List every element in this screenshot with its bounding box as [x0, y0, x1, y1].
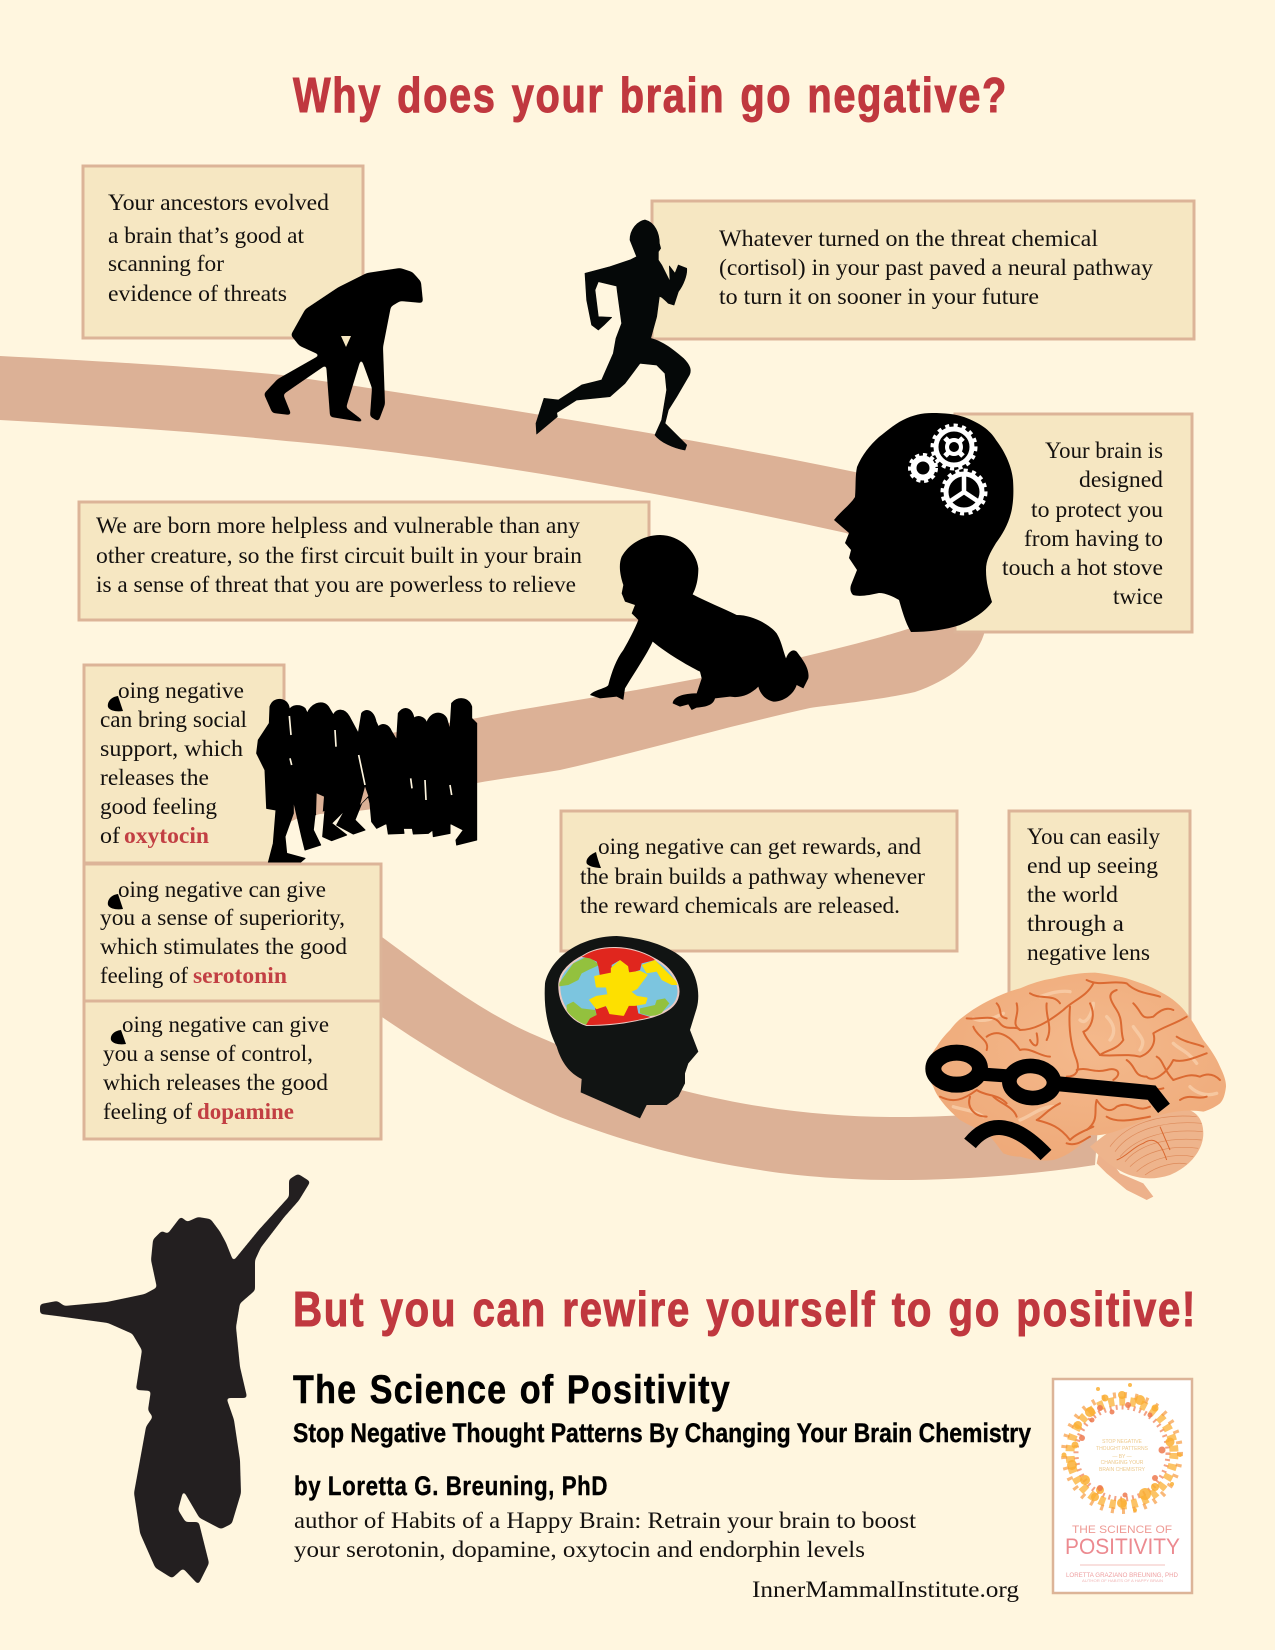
panel: ancestors: scanning for	[108, 251, 224, 276]
panel: cortisol pathway: (cortisol) in your past paved a neural pathway	[719, 255, 1154, 280]
book cover small title: CHANGING YOUR	[1101, 1460, 1144, 1466]
panel: hot stove: from having to	[1024, 526, 1163, 551]
panel: control dopamine	[84, 1001, 381, 1139]
book cover small title: BRAIN CHEMISTRY	[1099, 1467, 1146, 1473]
puzzle piece: green upper left	[559, 958, 598, 986]
panel: social support oxytocin: of	[100, 823, 120, 848]
book cover small title: — BY —	[1112, 1454, 1132, 1460]
panel: negative lens: You can easily	[1027, 824, 1160, 849]
panel: negative lens: end up seeing	[1027, 853, 1159, 878]
panel: helpless infant	[79, 502, 649, 620]
icon: clipped letter blob	[111, 1030, 126, 1044]
panel: negative lens	[1009, 811, 1190, 1031]
brain stem	[1097, 1147, 1153, 1200]
panel: hot stove: Your brain is	[1045, 438, 1163, 463]
panel: ancestors	[83, 166, 363, 338]
panel: negative lens: the world	[1027, 882, 1119, 907]
book subtitle: Stop Negative Thought Patterns By Changing Your Brain Chemistry	[293, 1418, 1031, 1448]
panel: hot stove: designed	[1079, 467, 1164, 492]
panel: helpless infant: is a sense of threat that you are powerless to relieve	[96, 572, 576, 597]
panel: cortisol pathway: to turn it on sooner in your future	[719, 284, 1039, 309]
panel: rewards: the brain builds a pathway whenever	[580, 864, 925, 889]
book title: The Science of Positivity	[293, 1368, 731, 1412]
panel: ancestors: Your ancestors evolved	[108, 190, 330, 215]
icon: gear large	[933, 426, 975, 468]
icon: realistic brain with glasses and frown	[927, 973, 1226, 1200]
panel: social support oxytocin: oxytocin	[124, 823, 209, 848]
icon: glasses	[933, 1053, 1164, 1108]
panel: hot stove: to protect you	[1031, 497, 1164, 522]
panel: ancestors: a brain that’s good at	[108, 223, 305, 248]
puzzle piece: red bottom	[586, 1006, 650, 1025]
panel: control dopamine: you a sense of control,	[103, 1041, 313, 1066]
brain folds	[940, 980, 1220, 1147]
panel: negative lens: negative lens	[1027, 940, 1150, 965]
panel: negative lens: through a	[1027, 911, 1124, 936]
book cover	[1053, 1379, 1192, 1593]
puzzle piece: yellow right	[642, 960, 680, 985]
title: Why does your brain go negative?	[293, 69, 1008, 123]
icon: jumping child silhouette	[41, 1175, 309, 1583]
puzzle piece: red top	[582, 948, 655, 975]
author bio: author of Habits of a Happy Brain: Retrain your brain to boost	[294, 1508, 917, 1533]
brain folds highlights	[953, 991, 1217, 1120]
panel: superiority serotonin	[84, 864, 381, 1001]
cerebellum	[1090, 1108, 1203, 1178]
website: InnerMammalInstitute.org	[752, 1577, 1020, 1602]
author: by Loretta G. Breuning, PhD	[294, 1471, 608, 1501]
panel: hot stove: twice	[1113, 584, 1163, 609]
panel: hot stove	[955, 414, 1192, 632]
book cover positivity: POSITIVITY	[1065, 1534, 1180, 1559]
book cover title: THE SCIENCE OF	[1072, 1524, 1172, 1536]
book cover small title: STOP NEGATIVE	[1102, 1439, 1143, 1445]
panel: social support oxytocin: support, which	[100, 736, 244, 761]
panel: control dopamine: which releases the good	[103, 1070, 329, 1095]
panel: control dopamine: feeling of	[103, 1099, 192, 1124]
panel: superiority serotonin: which stimulates the good	[100, 934, 348, 959]
icon: gear spoked	[943, 471, 985, 513]
panel: superiority serotonin: oing negative can give	[118, 877, 326, 902]
icon: clipped letter blob	[586, 852, 601, 868]
panel: social support oxytocin	[84, 665, 284, 863]
author bio: your serotonin, dopamine, oxytocin and endorphin levels	[294, 1537, 865, 1562]
icon: frown	[970, 1128, 1046, 1155]
icon: crowd silhouette	[257, 699, 477, 863]
panel: superiority serotonin: feeling of	[100, 963, 188, 988]
panel: rewards: oing negative can get rewards, and	[598, 834, 921, 859]
panel: cortisol pathway	[652, 201, 1194, 339]
icon: clipped letter blob	[108, 894, 123, 909]
icon: crawling baby silhouette	[590, 535, 809, 710]
book cover small title: THOUGHT PATTERNS	[1096, 1446, 1149, 1452]
panel: hot stove: touch a hot stove	[1002, 555, 1163, 580]
block: book details	[293, 1368, 1031, 1602]
winding path ribbon	[0, 356, 1100, 1180]
icon: runner silhouette	[536, 220, 690, 450]
icon: child head with puzzle brain	[545, 936, 698, 1118]
panel: rewards: the reward chemicals are released.	[580, 893, 900, 918]
book cover small title	[1096, 1439, 1149, 1473]
panel: ancestors: evidence of threats	[108, 281, 287, 306]
panel: helpless infant: We are born more helpless and vulnerable than any	[96, 513, 581, 538]
panel: social support oxytocin: oing negative	[118, 678, 244, 703]
panel: superiority serotonin: serotonin	[193, 963, 287, 988]
ring of dots	[1062, 1383, 1182, 1512]
panel: rewards	[561, 811, 957, 951]
panel: cortisol pathway: Whatever turned on the threat chemical	[719, 226, 1098, 251]
icon: head with gears	[834, 413, 1013, 632]
icon: clipped letter blob	[108, 696, 123, 711]
cerebrum	[927, 973, 1226, 1161]
icon: gear small	[910, 455, 936, 481]
puzzle piece: green lower right	[640, 998, 669, 1016]
panel: control dopamine: dopamine	[197, 1099, 294, 1124]
puzzle piece: green lower left	[567, 1002, 597, 1027]
panel: superiority serotonin: you a sense of superiority,	[100, 905, 345, 930]
icon: ape silhouette	[265, 269, 422, 421]
panel: social support oxytocin: can bring social	[100, 707, 247, 732]
author bio	[294, 1508, 917, 1562]
panel: helpless infant: other creature, so the first circuit built in your brain	[96, 543, 583, 568]
book cover author note: AUTHOR OF HABITS OF A HAPPY BRAIN	[1082, 1578, 1163, 1583]
book cover author: LORETTA GRAZIANO BREUNING, PHD	[1066, 1572, 1178, 1579]
panel: social support oxytocin: good feeling	[100, 794, 218, 819]
panel: control dopamine: oing negative can give	[122, 1012, 329, 1037]
puzzle piece: yellow cross	[590, 961, 647, 1015]
panel: social support oxytocin: releases the	[100, 765, 209, 790]
